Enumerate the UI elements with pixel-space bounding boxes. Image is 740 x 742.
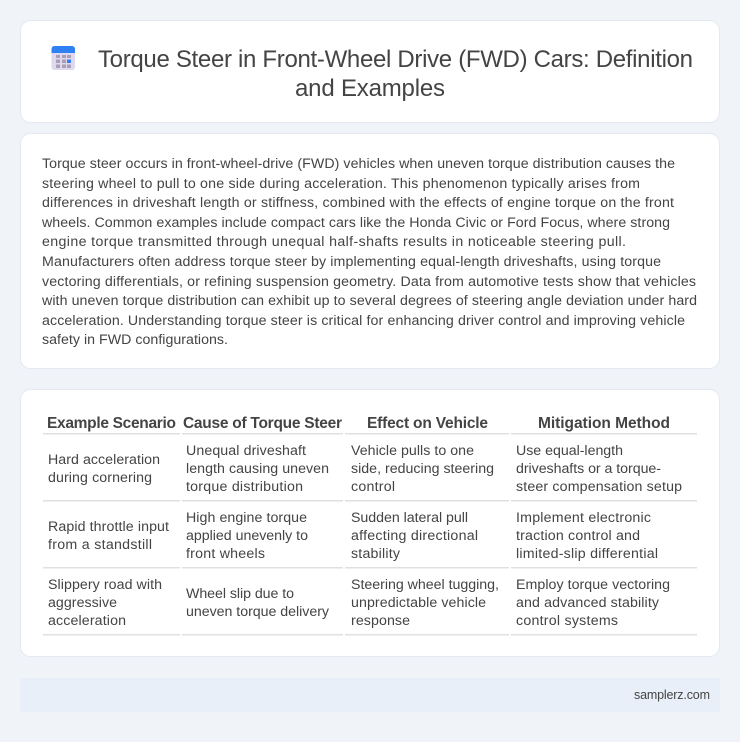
table row 3: unpredictable vehicle (351, 595, 486, 611)
table row 2: traction control and (516, 528, 640, 544)
text block: description paragraph: acceleration. Understanding torque steer is critical for enhancing driver control and improving vehicle (42, 313, 685, 329)
table row 3: aggressive (48, 595, 117, 611)
table row 3 (48, 577, 670, 629)
text block: description paragraph: safety in FWD configurations. (42, 332, 228, 348)
table row 2: Sudden lateral pull (351, 510, 468, 526)
table header: Mitigation Method (538, 415, 670, 432)
table row 1: driveshafts or a torque- (516, 461, 661, 477)
title: and Examples (295, 75, 445, 102)
panel: header (20, 20, 720, 122)
table row 2: High engine torque (186, 510, 307, 526)
table row 1: side, reducing steering (351, 461, 494, 477)
table row 1: steer compensation setup (516, 479, 682, 495)
table row 1: Vehicle pulls to one (351, 443, 474, 459)
table row 1: length causing uneven (186, 461, 329, 477)
table header: Effect on Vehicle (367, 415, 488, 432)
table row 3: Steering wheel tugging, (351, 577, 499, 593)
footer: samplerz.com (634, 688, 710, 702)
table row 1 (48, 443, 682, 495)
panel: table (20, 390, 720, 656)
table row 2: Implement electronic (516, 510, 651, 526)
footer (20, 678, 720, 712)
table row 3: Wheel slip due to (186, 586, 294, 602)
table row 2: applied unevenly to (186, 528, 308, 544)
text block: description paragraph (41, 156, 697, 348)
panel: description (20, 134, 720, 368)
text block: description paragraph: Torque steer occurs in front-wheel-drive (FWD) vehicles when uneven torque distribution causes the (42, 156, 675, 172)
text block: description paragraph: vectoring differentials, or refining suspension geometry. Data from automotive tests show that vehicles (42, 274, 696, 290)
table row 2 (48, 510, 658, 562)
text block: description paragraph: differences in driveshaft length or stiffness, combined with the effects of engine torque on the front (42, 195, 674, 211)
table row 1: control (351, 479, 395, 495)
table row 2: Rapid throttle input (48, 519, 169, 535)
title: Torque Steer in Front-Wheel Drive (FWD) Cars: Definition (98, 46, 693, 73)
table header: Example Scenario (47, 415, 176, 432)
icon: calendar (52, 46, 75, 70)
table row 3: Slippery road with (48, 577, 162, 593)
table row 1: Unequal driveshaft (186, 443, 306, 459)
table row 2: limited-slip differential (516, 546, 658, 562)
table row 3: uneven torque delivery (186, 604, 330, 620)
table row 2: front wheels (186, 546, 265, 562)
table header: Cause of Torque Steer (183, 415, 342, 432)
table row 1: during cornering (48, 470, 152, 486)
text block: description paragraph: Manufacturers often address torque steer by implementing equal-length driveshafts, using torque (42, 254, 661, 270)
table row 1: Hard acceleration (48, 452, 160, 468)
text block: description paragraph: wheels. Common examples include compact cars like the Honda Civic or Ford Focus, where strong (41, 215, 670, 231)
table row 3: acceleration (48, 613, 126, 629)
table row 3: control systems (516, 613, 618, 629)
table row 3: Employ torque vectoring (516, 577, 670, 593)
title (98, 46, 693, 102)
table row 2: from a standstill (48, 537, 152, 553)
table row 2: affecting directional (351, 528, 478, 544)
table row 2: stability (351, 546, 401, 562)
table header (47, 415, 670, 432)
table row 3: response (351, 613, 410, 629)
table row 3: and advanced stability (516, 595, 660, 611)
table row 1: Use equal-length (516, 443, 623, 459)
table row 1: torque distribution (186, 479, 303, 495)
text block: description paragraph: engine torque transmitted through unequal half-shafts results in noticeable steering pull. (42, 234, 626, 250)
text block: description paragraph: with uneven torque distribution can exhibit up to several degrees of steering angle deviation under hard (41, 293, 697, 309)
text block: description paragraph: steering wheel to pull to one side during acceleration. This phenomenon typically arises from (42, 176, 640, 192)
